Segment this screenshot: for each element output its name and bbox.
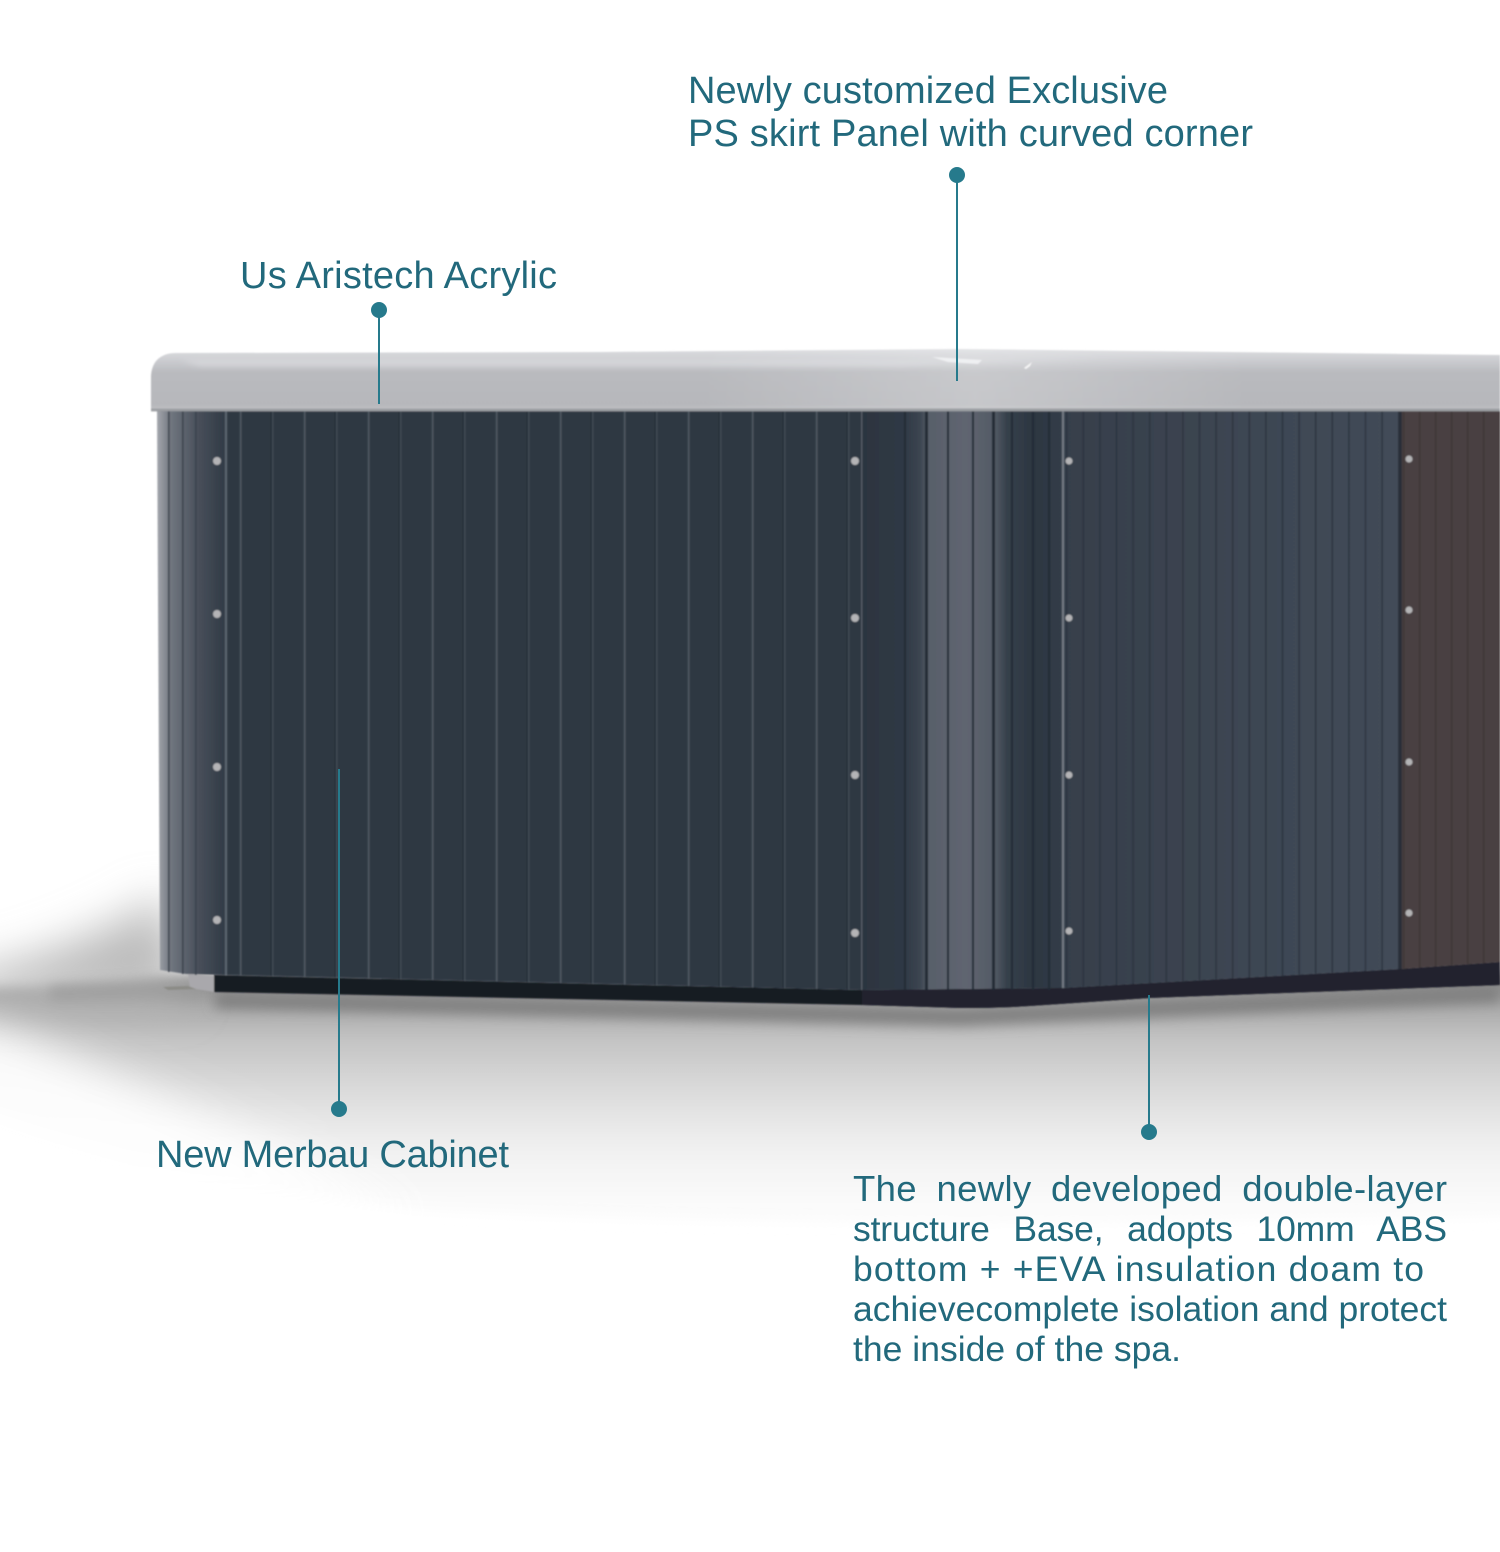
callout text: PS skirt panel	[688, 70, 1253, 155]
acrylic lid	[151, 349, 1500, 412]
left edge panel	[157, 411, 226, 975]
callout: double-layer base	[853, 995, 1447, 1369]
callout text: double-layer base	[853, 1168, 1447, 1369]
callout: PS skirt panel	[688, 70, 1253, 381]
callout text: Aristech acrylic: Us Aristech Acrylic	[240, 255, 557, 297]
callout text: double-layer base: bottom + +EVA insulation doam to	[853, 1249, 1424, 1289]
callout text: double-layer base: The newly developed double-layer	[853, 1168, 1447, 1209]
callout text: PS skirt panel: Newly customized Exclusive	[688, 70, 1168, 112]
front panel: Merbau cabinet	[226, 411, 862, 990]
callout text: PS skirt panel: PS skirt Panel with curved corner	[688, 113, 1253, 155]
screws	[213, 456, 1412, 937]
callout: Aristech acrylic	[240, 255, 557, 404]
spa cabinet	[151, 349, 1500, 1008]
leader: PS skirt panel	[949, 167, 965, 381]
leader: double-layer base	[1141, 995, 1157, 1140]
callout text: Merbau cabinet: New Merbau Cabinet	[156, 1134, 509, 1176]
leader: Merbau cabinet	[331, 769, 347, 1117]
callout text: double-layer base: achievecomplete isolation and protect	[853, 1289, 1447, 1329]
right side panel	[1063, 411, 1400, 988]
callout: Merbau cabinet	[156, 769, 509, 1176]
base: double-layer structure	[163, 962, 1500, 1008]
callout text: double-layer base: structure Base, adopts 10mm ABS	[853, 1209, 1447, 1249]
brown panel	[1400, 411, 1500, 969]
curved corner panel	[862, 411, 1063, 990]
callout text: double-layer base: the inside of the spa.	[853, 1329, 1181, 1369]
ground shadow	[0, 895, 1500, 1222]
leader: Aristech acrylic	[371, 302, 387, 404]
